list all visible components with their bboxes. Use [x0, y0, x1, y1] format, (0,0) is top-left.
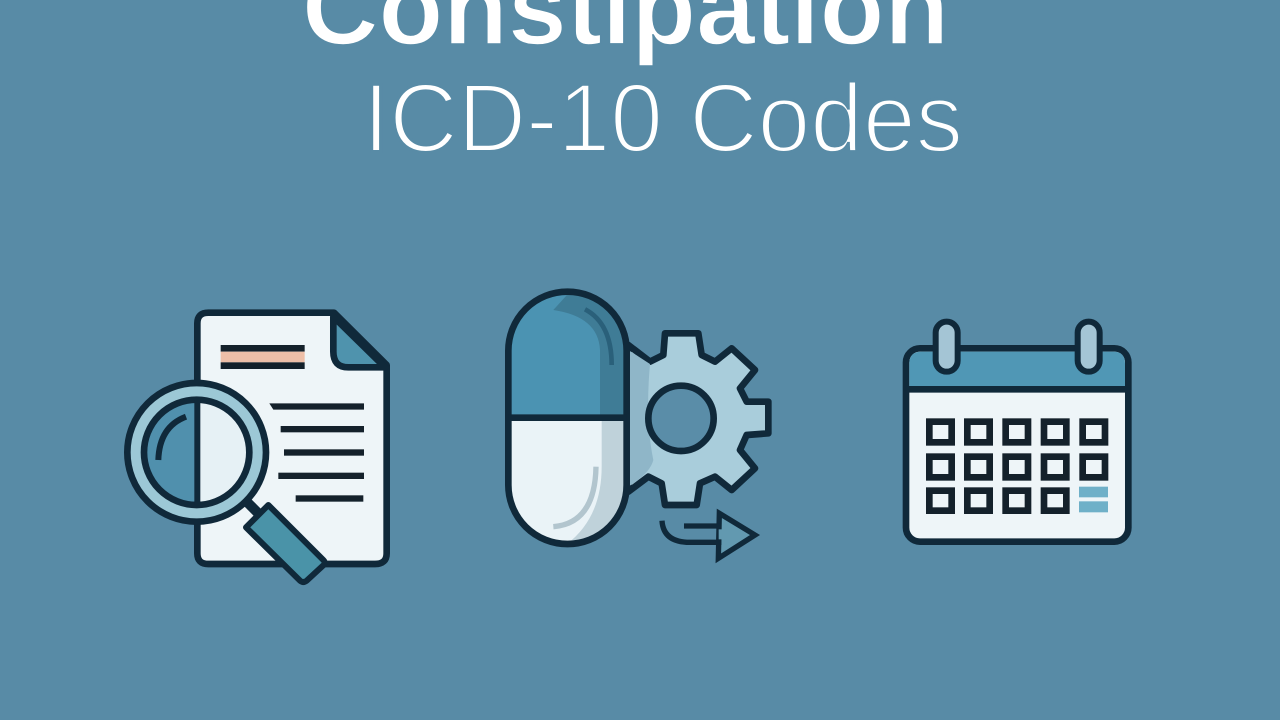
folded corner [333, 317, 385, 367]
icon: pill with gear and arrow [508, 292, 768, 558]
highlighted header [221, 345, 305, 369]
binder rings [936, 322, 1100, 372]
icon: calendar [906, 322, 1128, 542]
lens glint [158, 417, 186, 460]
calendar header [909, 352, 1125, 389]
calendar body [906, 348, 1128, 542]
title [302, 0, 963, 172]
arrow [662, 513, 755, 558]
date grid [929, 422, 1105, 511]
text lines [269, 403, 364, 502]
highlighted date [1079, 487, 1108, 512]
capsule [508, 292, 627, 547]
subheading: ICD-10 Codes: ICD-10 Codes [363, 64, 963, 172]
document page [197, 313, 387, 564]
magnifying glass [127, 383, 325, 582]
capsule highlights [585, 309, 612, 365]
lens ring [127, 383, 266, 522]
icon: document with magnifying glass [127, 313, 387, 582]
handle [246, 505, 325, 582]
lens [147, 403, 246, 502]
gear [628, 333, 768, 505]
gear hole [648, 386, 714, 451]
